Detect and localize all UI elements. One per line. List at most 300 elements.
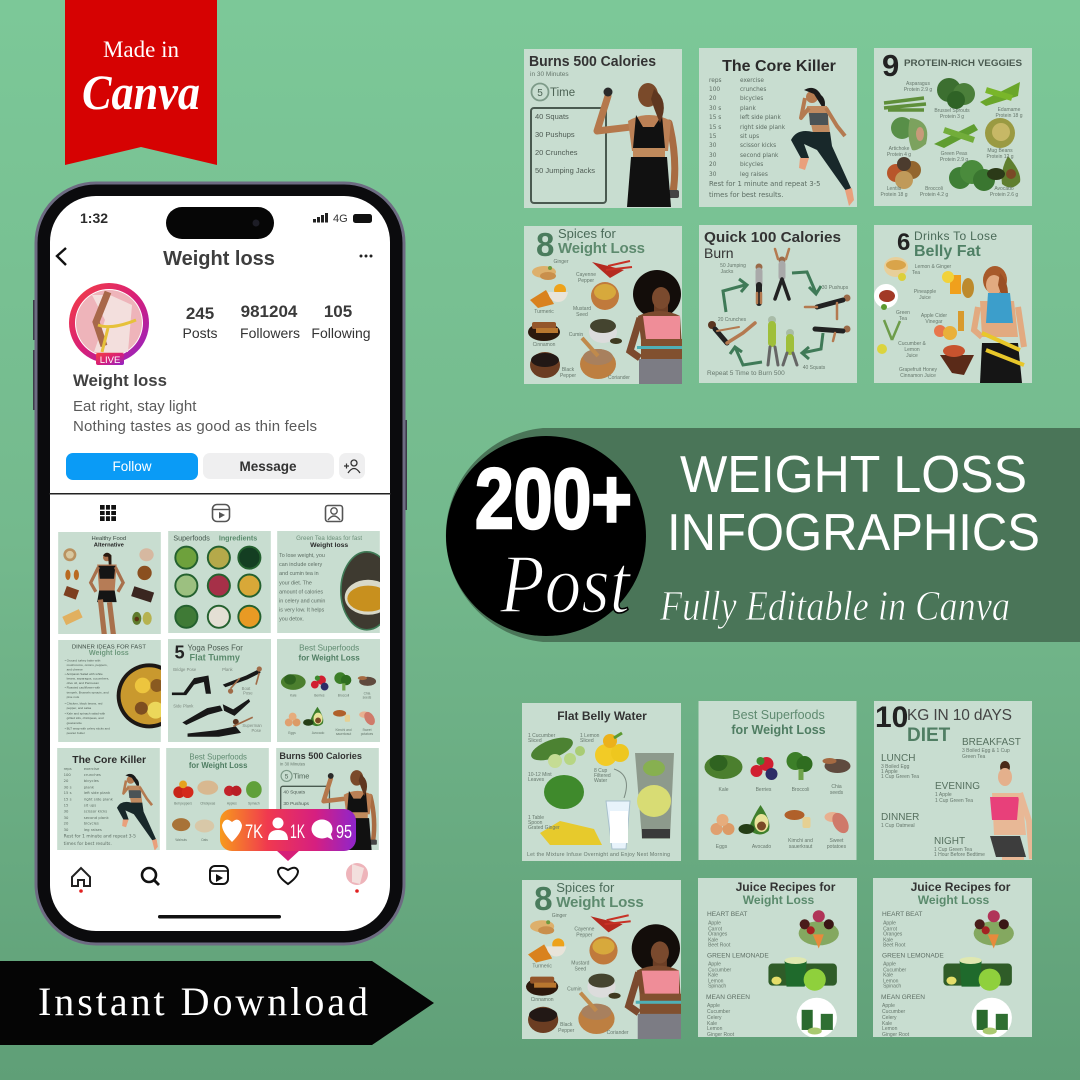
card: Juice Recipes: Oranges: [708, 931, 728, 937]
mini card: Dinner Ideas: tempeh, Brussels sprouts, and: [67, 690, 109, 694]
card: 8 Spices for Weight Loss: Black: [562, 367, 575, 373]
mini card: Best Superfoods: Kimchi and: [335, 728, 352, 732]
card: Flat Belly Water: [522, 703, 681, 861]
card: Best Superfoods: Chia: [831, 784, 842, 790]
mini card: Best Superfoods (second set): Walnuts: [175, 838, 187, 842]
mini card: Best Superfoods: Best Superfoods: [299, 644, 359, 653]
mini card: The Core Killer: right side plank: [84, 798, 114, 802]
card: 6 Drinks To Lose Belly Fat: Cinnamon Juice: [900, 373, 936, 379]
mini card: Dinner Ideas: peanut butter: [67, 731, 85, 735]
mini card: Dinner Ideas: • BLT wrap with celery sticks and: [65, 727, 110, 731]
profile header: Weight loss: [163, 248, 275, 270]
mini card: Burns 500 Calories: 5: [285, 774, 289, 781]
tab bar: [49, 493, 391, 522]
card: Juice Recipes (repeat): GREEN LEMONADE: [882, 952, 944, 959]
card: 6 Drinks To Lose Belly Fat: Cucumber &: [898, 341, 927, 347]
card: Best Superfoods: Kale: [718, 787, 729, 793]
card: The Core Killer: reps: [709, 78, 722, 84]
card: 8 Spices for Weight Loss (repeat): Weight Loss: [556, 894, 644, 911]
mini card: Dinner Ideas: [58, 640, 161, 742]
mini card: The Core Killer: sit ups: [84, 803, 96, 807]
card: Best Superfoods: for Weight Loss: [731, 723, 826, 737]
card: Juice Recipes (repeat): Oranges: [883, 931, 903, 937]
mini card: The Core Killer: 20: [64, 822, 69, 826]
exercise figures: [708, 249, 850, 365]
card: Juice Recipes (repeat): Kale: [882, 1021, 892, 1027]
mini card: The Core Killer: 15 s: [64, 798, 72, 802]
mini card: Green Tea Ideas: can include celery: [279, 562, 322, 568]
mini card: Best Superfoods: Eggs: [288, 731, 296, 735]
card: Juice Recipes (repeat): Apple: [883, 920, 896, 926]
mini card: The Core Killer: exercise: [84, 767, 100, 771]
mini card: The Core Killer: scissor kicks: [84, 809, 107, 813]
card: 9 Protein-Rich Veggies: Mug Beans: [987, 148, 1013, 154]
card: 6 Drinks To Lose Belly Fat: Juice: [919, 295, 931, 301]
mini card: Dinner Ideas: grilled tofu, chickpeas, and: [67, 716, 104, 720]
bio: Eat right, stay light: [73, 398, 197, 415]
mini card: Superfoods Ingredients: Ingredients: [219, 535, 257, 543]
card: 8 Spices for Weight Loss (repeat): Cayenne: [574, 926, 595, 932]
mini card: The Core Killer: 15 s: [64, 791, 72, 795]
card: Quick 100 Calories Burn: [699, 225, 857, 383]
mini card: Green Tea Ideas: and cumin tea in: [279, 571, 319, 577]
card: The Core Killer: 20: [709, 96, 717, 102]
card: 8 Spices for Weight Loss: Seed: [576, 312, 588, 318]
card: Juice Recipes (repeat): Cucumber: [883, 968, 907, 974]
card: Juice Recipes: MEAN GREEN: [706, 994, 750, 1001]
card: 10 KG in 10 Days Diet: 1 Apple: [935, 792, 952, 798]
mini card: Yoga Poses: Pose: [243, 690, 253, 695]
card: Burns 500 Calories: [524, 49, 682, 208]
card: 10 KG in 10 Days Diet: 1 Hour Before Bedtime: [934, 852, 985, 858]
card: Juice Recipes: Apple: [707, 1003, 720, 1009]
card: 10 KG in 10 Days Diet: DIET: [907, 725, 951, 746]
mini card: Superfoods Ingredients: Superfoods: [173, 535, 210, 543]
card: The Core Killer: bicycles: [740, 162, 763, 168]
icon: repeat 5 times: Time: [550, 87, 575, 99]
card: 6 Drinks To Lose Belly Fat: Apple Cider: [921, 313, 947, 319]
card: 8 Spices for Weight Loss (repeat): Black: [560, 1022, 573, 1028]
card: 10 KG in 10 Days Diet: 3 Boiled Egg: [881, 764, 910, 770]
card: 6 Drinks To Lose Belly Fat: Drinks To Lose: [914, 229, 997, 243]
stats: Following: [311, 325, 371, 341]
notification bubble: 7K: [245, 822, 263, 843]
card: 10 KG in 10 Days Diet: DINNER: [881, 812, 919, 823]
card: 6 Drinks To Lose Belly Fat: Lemon & Ginger: [915, 264, 952, 270]
icon: repeat 5 times: [532, 84, 575, 100]
mini card: Best Superfoods (second set): Chickpeas: [200, 802, 216, 806]
mini card: Green Tea Ideas: you detox.: [279, 617, 304, 623]
card: Juice Recipes: Weight Loss: [743, 893, 815, 907]
card: 8 Spices for Weight Loss: Turmeric: [534, 309, 554, 315]
mini card: Best Superfoods: sauerkraut: [336, 732, 351, 736]
mini card: Yoga Poses: Bridge Pose: [173, 667, 197, 672]
card: 9 Protein-Rich Veggies: Artichoke: [889, 146, 910, 152]
mini card: Green Tea Ideas: your diet. The: [279, 580, 312, 586]
icon: repeat 5 times: 5: [537, 88, 543, 99]
card: Juice Recipes (repeat): Kale: [883, 973, 893, 979]
card: 8 Spices for Weight Loss (repeat): 8: [534, 881, 553, 918]
mini card: Healthy Food Alternative: [58, 532, 161, 634]
card: 8 Spices for Weight Loss: Pepper: [560, 373, 576, 379]
heading: Weight Loss: WEIGHT LOSS: [680, 446, 1027, 504]
card: 8 Spices for Weight Loss: Cumin: [569, 332, 583, 338]
mini card: Best Superfoods: Sweet: [362, 728, 372, 732]
banner: title block: [446, 428, 1080, 642]
card: Juice Recipes (repeat): Kale: [883, 937, 893, 943]
badge circle: [446, 436, 646, 636]
card: Burns 500 Calories: in 30 Minutes: [530, 71, 569, 78]
stats: [182, 302, 371, 341]
card: 8 Spices for Weight Loss: Cinnamon: [533, 342, 556, 348]
mini card: Dinner Ideas: • Kale and spinach salad with: [65, 712, 105, 716]
card: The Core Killer: 15 s: [709, 125, 721, 131]
card: 8 Spices for Weight Loss: Coriander: [608, 375, 630, 381]
card: Quick 100 Calories Burn: Jacks: [721, 269, 734, 275]
card: Best Superfoods: potatoes: [827, 844, 847, 850]
card: 10 KG in 10 Days Diet: 1 Cup Oatmeal: [881, 823, 915, 829]
mini card: Dinner Ideas: pepper, and salsa: [67, 706, 91, 710]
card: The Core Killer: plank: [740, 106, 757, 112]
mini card: The Core Killer: reps: [64, 767, 72, 771]
mini card: The Core Killer: bicycles: [84, 779, 99, 783]
card: Best Superfoods: Sweet: [830, 838, 844, 844]
card: 9 Protein-Rich Veggies: Green Peas: [941, 151, 968, 157]
card: Juice Recipes: Apple: [708, 920, 721, 926]
card: 8 Spices for Weight Loss: Weight Loss: [558, 240, 645, 257]
card: Flat Belly Water: Let the Mixture Infuse Overnight and Enjoy Next Morning: [527, 852, 670, 858]
card: The Core Killer: leg raises: [740, 172, 768, 178]
status bar: 1:32: [80, 210, 108, 226]
mini card: Green Tea Ideas: Weight loss: [310, 542, 348, 549]
mini card: Green Tea Ideas: in celery and cumin: [279, 598, 325, 604]
card: Juice Recipes: Cucumber: [708, 968, 732, 974]
status bar: [80, 207, 372, 239]
mini card: Best Superfoods (second set): for Weight Loss: [189, 761, 248, 770]
card: 9 Protein-Rich Veggies: Protein 12 g: [987, 154, 1014, 160]
card: 8 Spices for Weight Loss (repeat): Seed: [575, 967, 586, 973]
ribbon: Made in Canva: Canva: [82, 64, 200, 120]
mini card: Dinner Ideas: Weight loss: [89, 649, 129, 657]
card: The Core Killer: 30 s: [709, 106, 721, 112]
mini card: The Core Killer: 15: [64, 803, 69, 807]
card: 9 Protein-Rich Veggies: Broccoli: [925, 186, 943, 192]
heading: Infographics: INFOGRAPHICS: [667, 504, 1040, 562]
mini card: Best Superfoods (second set): Bell peppers: [174, 802, 192, 806]
card: 9 Protein-Rich Veggies: Edamame: [998, 107, 1021, 113]
card: Flat Belly Water: 1 Lemon: [580, 733, 600, 739]
card: Best Superfoods: Best Superfoods: [732, 708, 825, 722]
card: 10 KG in 10 Days Diet: NIGHT: [934, 836, 965, 847]
card: 9 Protein-Rich Veggies: Lentils: [887, 186, 902, 192]
mini card: Green Tea Ideas: Green Tea Ideas for fast: [296, 535, 362, 542]
stats: 105: [324, 302, 352, 321]
mini card: Dinner Ideas: beans, asparagus, cucumbers,: [67, 677, 109, 681]
card: Juice Recipes: Kale: [708, 973, 718, 979]
mini card: Best Superfoods (second set): Spinach: [248, 802, 260, 806]
card: Quick 100 Calories Burn: Quick 100 Calories: [704, 230, 841, 246]
card: 10 KG in 10 Days Diet: [874, 701, 1032, 860]
card: 6 Drinks To Lose Belly Fat: Vinegar: [925, 319, 943, 325]
card: 9 Protein-Rich Veggies: Protein 2.9 g: [940, 157, 968, 163]
mini card: Burns 500 Calories: in 30 Minutes: [280, 762, 305, 767]
card: Juice Recipes: Spinach: [708, 984, 726, 990]
mini card: Burns 500 Calories: 40 Squats: [283, 789, 306, 795]
mini card: The Core Killer: [57, 748, 160, 850]
card: 6 Drinks To Lose Belly Fat: Tea: [899, 316, 907, 322]
card: 10 KG in 10 Days Diet: LUNCH: [881, 753, 915, 764]
mini card: The Core Killer: bicycles: [84, 822, 99, 826]
card: Best Superfoods: Kimchi and: [788, 838, 813, 844]
card: The Core Killer: 30: [709, 153, 717, 159]
banner background: [446, 428, 1080, 642]
ribbon: Made in Canva: Made in: [103, 37, 180, 62]
mini card: Yoga Poses: [168, 639, 271, 742]
card: Juice Recipes (repeat): Spinach: [883, 984, 901, 990]
bio: Nothing tastes as good as thin feels: [73, 418, 317, 435]
mini card: Dinner Ideas: mushrooms, onions, peppers,: [67, 663, 108, 667]
card: Juice Recipes (repeat): Weight Loss: [918, 893, 990, 907]
card: Juice Recipes (repeat): Beet Root: [883, 942, 906, 948]
card: 8 Spices for Weight Loss (repeat): Ginger: [552, 913, 567, 919]
mini card: The Core Killer: 30: [64, 809, 69, 813]
card: 10 KG in 10 Days Diet: 10: [875, 701, 908, 734]
card: The Core Killer: right side plank: [740, 125, 786, 131]
mini card: The Core Killer: leg raises: [84, 828, 102, 832]
card: 8 Spices for Weight Loss (repeat): Cumin: [567, 987, 582, 993]
bottom navigation: [72, 863, 368, 918]
card: The Core Killer: 100: [709, 87, 720, 93]
mini card: Dinner Ideas: and cheese: [67, 668, 83, 672]
mini card: The Core Killer: crunches: [84, 773, 101, 777]
mini card: Burns 500 Calories: 30 Pushups: [283, 801, 310, 807]
buttons: Follow: [112, 459, 152, 474]
card: 8 Spices for Weight Loss: Ginger: [553, 259, 569, 265]
stats: Posts: [182, 325, 218, 341]
bio: Weight loss: [73, 371, 167, 390]
card: 8 Spices for Weight Loss: Spices for: [558, 226, 616, 241]
card: Flat Belly Water: Spoon: [528, 820, 543, 826]
bio: [73, 371, 317, 435]
card: Juice Recipes: Cucumber: [707, 1009, 731, 1015]
card: Flat Belly Water: 10-12 Mint: [528, 772, 552, 778]
card: Juice Recipes: Apple: [708, 962, 721, 968]
card: Best Superfoods: sauerkraut: [789, 844, 813, 850]
card: 9 Protein-Rich Veggies: Asparagus: [906, 81, 930, 87]
card: Best Superfoods: Avocado: [752, 844, 771, 850]
card: 6 Drinks To Lose Belly Fat: Grapefruit Honey: [899, 367, 938, 373]
card: Flat Belly Water: 1 Cucumber: [528, 733, 556, 739]
card: Juice Recipes: Juice Recipes for: [736, 880, 836, 894]
mini card: Dinner Ideas: pine nuts: [67, 695, 80, 699]
card: The Core Killer: 30: [709, 143, 717, 149]
card: The Core Killer: 20: [709, 162, 717, 168]
card: The Core Killer: sit ups: [740, 134, 759, 140]
card: Quick 100 Calories Burn: 40 Squats: [803, 365, 826, 371]
mini card: The Core Killer: times for best results.: [64, 841, 112, 847]
card: 6 Drinks To Lose Belly Fat: Belly Fat: [914, 243, 981, 260]
card: Quick 100 Calories Burn: 20 Crunches: [718, 317, 747, 323]
card: 8 Spices for Weight Loss: [524, 226, 682, 384]
card: 10 KG in 10 Days Diet: Green Tea: [962, 754, 985, 760]
mini card: Green Tea Ideas: To lose weight, you: [279, 553, 325, 559]
card: Juice Recipes (repeat): Juice Recipes for: [911, 880, 1011, 894]
card: 9 Protein-Rich Veggies: Brussel Sprouts: [934, 108, 970, 114]
card: 6 Drinks To Lose Belly Fat: Lemon: [904, 347, 920, 353]
subheading: Fully Editable in Canva: [659, 584, 1010, 630]
mini card: Healthy Food Alternative: Alternative: [94, 542, 125, 548]
card: The Core Killer: [699, 48, 857, 207]
exercise box: 20 Crunches: [535, 148, 578, 157]
exercise box: 40 Squats: [535, 112, 569, 121]
card: 6 Drinks To Lose Belly Fat: [874, 225, 1032, 383]
card: Quick 100 Calories Burn: 50 Jumping: [720, 263, 746, 269]
card: Juice Recipes: Lemon: [708, 979, 724, 985]
card: 8 Spices for Weight Loss (repeat): [522, 880, 681, 1039]
mini card: Best Superfoods: Avocado: [312, 731, 325, 735]
mini card: The Core Killer: plank: [84, 785, 95, 789]
mini card: Yoga Poses: Flat Tummy: [190, 653, 241, 663]
card: Juice Recipes: [698, 878, 857, 1038]
mini card: Best Superfoods: [277, 639, 380, 742]
card: Juice Recipes (repeat): Cucumber: [882, 1009, 906, 1015]
mini card: Best Superfoods: Kale: [290, 693, 297, 697]
mini card: Yoga Poses: Yoga Poses For: [188, 644, 243, 653]
card: 10 KG in 10 Days Diet: BREAKFAST: [962, 737, 1021, 748]
card: 6 Drinks To Lose Belly Fat: Green: [896, 310, 910, 316]
card: 10 KG in 10 Days Diet: EVENING: [935, 781, 980, 792]
mini card: The Core Killer: 30 s: [64, 785, 72, 789]
mini card: The Core Killer: The Core Killer: [72, 755, 146, 766]
card: The Core Killer: second plank: [740, 153, 779, 159]
card: Juice Recipes (repeat): [873, 878, 1032, 1038]
mini card: Healthy Food Alternative: Healthy Food: [92, 536, 126, 542]
card: 8 Spices for Weight Loss (repeat): Cinnamon: [531, 997, 554, 1003]
stats: 981204: [241, 302, 298, 321]
mini card: Best Superfoods: for Weight Loss: [299, 654, 360, 663]
mini card: Dinner Ideas: • Ground turkey bake with: [65, 658, 101, 662]
mini card: The Core Killer: second plank: [84, 816, 109, 820]
card: 10 KG in 10 Days Diet: 3 Boiled Egg & 1 Cup: [962, 748, 1010, 754]
card: Best Superfoods: Eggs: [716, 844, 728, 850]
card: The Core Killer: 15 s: [709, 115, 721, 121]
ribbon: Made in Canva: [65, 0, 217, 165]
mini card: Best Superfoods (second set): Oats: [201, 838, 208, 842]
card: The Core Killer: bicycles: [740, 96, 763, 102]
mini card: Dinner Ideas: DINNER IDEAS FOR FAST: [72, 644, 146, 650]
mini card: Yoga Poses: Boat: [242, 686, 251, 691]
card: 8 Spices for Weight Loss (repeat): Pepper: [576, 932, 593, 938]
mini card: Best Superfoods (second set): Apples: [227, 802, 237, 806]
card: 8 Spices for Weight Loss: Pepper: [578, 278, 594, 284]
card: The Core Killer: crunches: [740, 87, 766, 93]
card: Juice Recipes: Celery: [707, 1015, 722, 1021]
card: 8 Spices for Weight Loss (repeat): Turmeric: [532, 964, 552, 970]
stats: 245: [186, 304, 214, 323]
mini card: Superfoods Ingredients: [168, 531, 271, 633]
mini card: Best Superfoods: potatoes: [361, 732, 374, 736]
banner: Instant Download: [0, 961, 434, 1045]
card: Best Superfoods: seeds: [830, 790, 844, 796]
card: 10 KG in 10 Days Diet: 1 Cup Green Tea: [881, 774, 919, 780]
mini card: Best Superfoods: Chia: [364, 691, 370, 695]
card: Best Superfoods: Broccoli: [792, 787, 809, 793]
card: 9 Protein-Rich Veggies: Protein 18 g: [996, 113, 1023, 119]
card: The Core Killer: Rest for 1 minute and repeat 3-5: [709, 180, 820, 188]
buttons: [66, 453, 365, 480]
notification bubble: 95: [336, 822, 352, 842]
mini card: Dinner Ideas: • Roasted cauliflower with: [65, 686, 100, 690]
profile header: [57, 248, 372, 270]
figure: woman with dumbbells: [597, 83, 679, 207]
card: 8 Spices for Weight Loss (repeat): Coriander: [607, 1030, 629, 1036]
card: Juice Recipes (repeat): Carrot: [883, 926, 898, 932]
card: Juice Recipes (repeat): Ginger Root: [882, 1032, 910, 1038]
card: 8 Spices for Weight Loss: Cayenne: [576, 272, 596, 278]
mini card: Green Tea Ideas: amount of calories: [279, 589, 323, 595]
card: Best Superfoods: Berries: [756, 787, 772, 793]
card: Flat Belly Water: Leaves: [528, 777, 545, 783]
badge text: 200+: 200+: [475, 452, 632, 547]
mini card: Yoga Poses: Side Plank: [173, 703, 194, 708]
mini card: Dinner Ideas: • Antipasto Salad with white: [65, 672, 103, 676]
mini card: Dinner Ideas: • Chicken, black beans, red: [65, 701, 103, 705]
mini card: Best Superfoods (second set): Best Superfoods: [189, 753, 247, 762]
banner: Instant Download: Instant Download: [38, 979, 368, 1024]
card: 8 Spices for Weight Loss (repeat): Spices for: [556, 880, 615, 895]
card: Juice Recipes (repeat): Apple: [882, 1003, 895, 1009]
card: The Core Killer: scissor kicks: [740, 143, 776, 149]
card: Juice Recipes: HEART BEAT: [707, 911, 747, 918]
card: 6 Drinks To Lose Belly Fat: 6: [897, 229, 910, 256]
mini card: The Core Killer: 30: [64, 828, 69, 832]
card: Quick 100 Calories Burn: Repeat 5 Time to Burn 500: [707, 370, 785, 377]
card: Juice Recipes (repeat): Lemon: [883, 979, 899, 985]
mini card: Burns 500 Calories: Burns 500 Calories: [279, 750, 362, 761]
mini card: Best Superfoods: Berries: [314, 693, 325, 697]
card: 6 Drinks To Lose Belly Fat: Tea: [912, 270, 920, 276]
mini card: Dinner Ideas: guacamole: [67, 721, 82, 725]
mini card: The Core Killer: left side plank: [84, 791, 111, 795]
badge text: Post: Post: [499, 538, 632, 631]
card: Flat Belly Water: Water: [594, 778, 607, 784]
card: Flat Belly Water: Sliced: [580, 738, 594, 744]
mini card: Yoga Poses: Plank: [222, 667, 234, 672]
mini card: Green Tea Ideas: is very low. It helps: [279, 608, 325, 614]
card: Juice Recipes: Kale: [707, 1021, 717, 1027]
card: Juice Recipes (repeat): Celery: [882, 1015, 897, 1021]
cycle arrows: [723, 272, 823, 365]
card: 6 Drinks To Lose Belly Fat: Juice: [906, 353, 918, 359]
card: Flat Belly Water: 1 Table: [528, 815, 544, 821]
mini card: Green Tea Ideas: [277, 531, 380, 633]
mini card: The Core Killer: 20: [64, 779, 69, 783]
phone body: [33, 183, 407, 944]
exercise box: 50 Jumping Jacks: [535, 166, 595, 175]
card: Juice Recipes: Ginger Root: [707, 1032, 735, 1038]
card: Juice Recipes: Beet Root: [708, 942, 731, 948]
card: Flat Belly Water: Flat Belly Water: [557, 709, 647, 723]
mini card: Best Superfoods: Broccoli: [338, 693, 350, 697]
card: The Core Killer: 15: [709, 134, 717, 140]
mini card: The Core Killer: Rest for 1 minute and repeat 3-5: [64, 834, 136, 840]
card: 9 Protein-Rich Veggies: Protein 18 g: [881, 192, 908, 198]
card: 10 KG in 10 Days Diet: 1 Cup Green Tea: [935, 798, 973, 804]
card: 8 Spices for Weight Loss (repeat): Mustard: [571, 961, 590, 967]
card: Flat Belly Water: Sliced: [528, 738, 542, 744]
phone mockup: [33, 183, 407, 944]
card: 8 Spices for Weight Loss: 8: [536, 226, 554, 263]
